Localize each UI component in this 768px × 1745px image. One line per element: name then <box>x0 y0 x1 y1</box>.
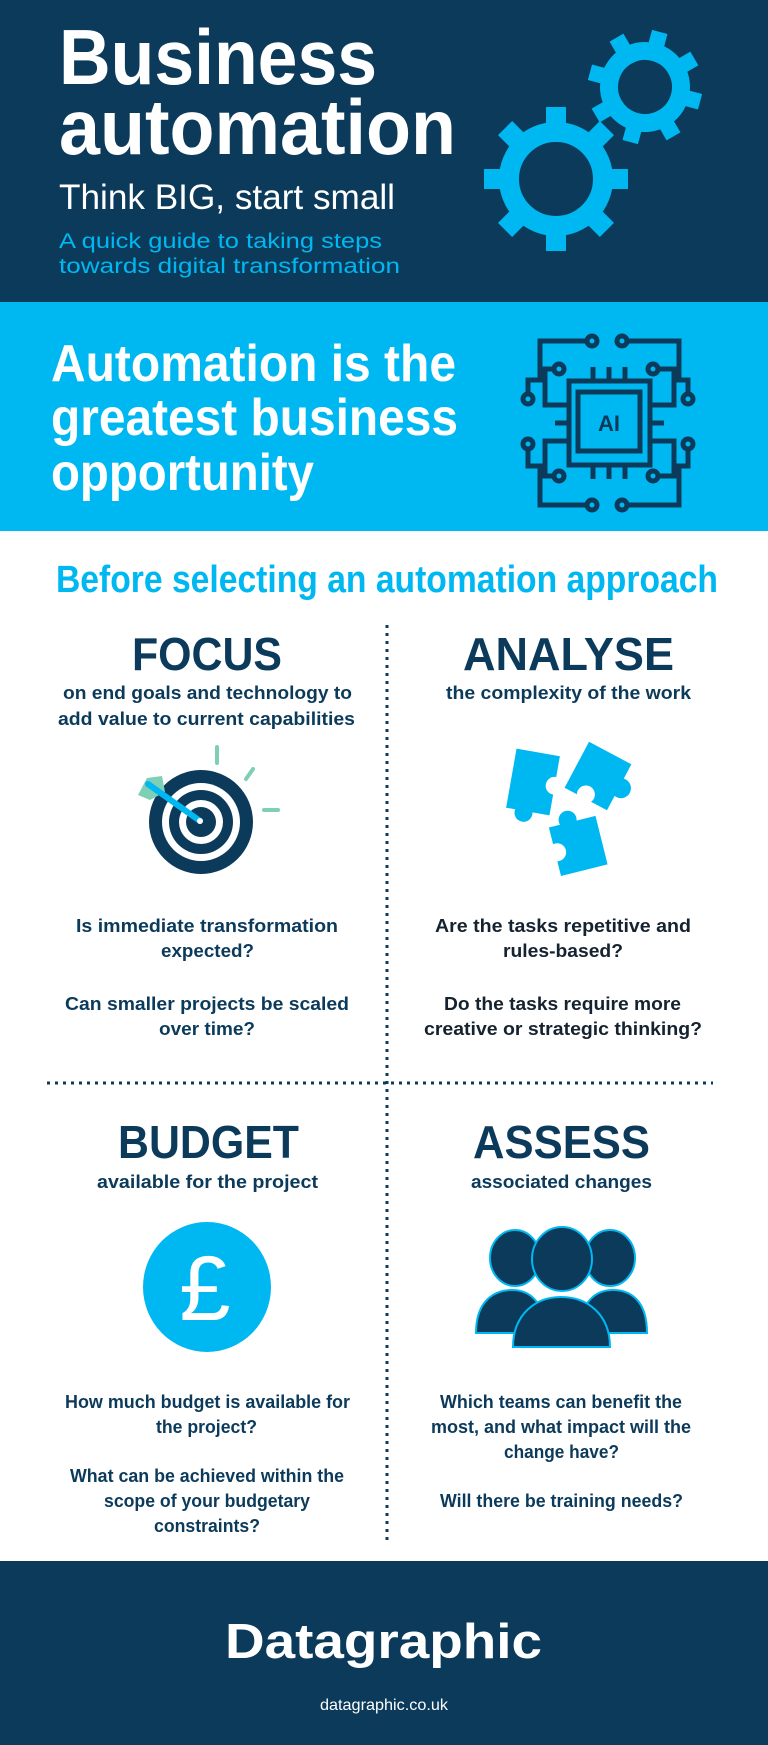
analyse questions: Are the tasks repetitive and <box>435 916 691 936</box>
banner headline <box>51 335 458 502</box>
title <box>59 13 456 171</box>
tagline: A quick guide to taking steps <box>59 230 382 253</box>
focus subtitle <box>58 683 355 729</box>
assess questions: most, and what impact will the <box>431 1417 691 1437</box>
heading: assess: ASSESS <box>473 1116 650 1168</box>
heading: budget: BUDGET <box>118 1116 299 1168</box>
focus questions: Can smaller projects be scaled <box>65 994 349 1014</box>
focus questions: over time? <box>159 1019 255 1039</box>
assess questions <box>431 1392 691 1511</box>
footer logo: Datagraphic <box>225 1615 542 1669</box>
assess questions: Which teams can benefit the <box>440 1392 682 1412</box>
assess questions: Will there be training needs? <box>440 1491 683 1511</box>
analyse questions: rules-based? <box>503 941 623 961</box>
icon: people <box>476 1227 647 1347</box>
icon: target <box>138 747 278 874</box>
panel: analyse <box>424 628 702 1039</box>
assess subtitle: associated changes <box>471 1172 652 1192</box>
panel: assess <box>431 1116 691 1511</box>
analyse questions: creative or strategic thinking? <box>424 1019 702 1039</box>
analyse questions: Do the tasks require more <box>444 994 681 1014</box>
panel: budget <box>65 1116 350 1536</box>
budget questions: How much budget is available for <box>65 1392 350 1412</box>
icon: AI chip <box>523 336 693 510</box>
budget questions: the project? <box>156 1417 257 1437</box>
tagline <box>59 230 400 278</box>
assess questions: change have? <box>504 1442 619 1462</box>
budget questions <box>65 1392 350 1536</box>
title: automation <box>59 83 456 171</box>
title: Business <box>59 13 377 101</box>
heading: focus: FOCUS <box>132 628 282 680</box>
banner headline: opportunity <box>51 444 314 502</box>
tagline: towards digital transformation <box>59 255 400 278</box>
analyse subtitle: the complexity of the work <box>446 683 692 703</box>
focus questions: Is immediate transformation <box>76 916 338 936</box>
panel: focus <box>58 628 355 1039</box>
focus subtitle: add value to current capabilities <box>58 709 355 729</box>
footer url: datagraphic.co.uk <box>320 1697 449 1714</box>
banner panel <box>0 302 768 531</box>
icon: pound coin: £ <box>179 1238 231 1340</box>
budget questions: scope of your budgetary <box>104 1491 310 1511</box>
heading: analyse: ANALYSE <box>463 628 674 680</box>
icon: AI chip: AI <box>598 411 620 436</box>
focus subtitle: on end goals and technology to <box>63 683 352 703</box>
footer <box>0 1561 768 1745</box>
icon: pound coin <box>143 1222 271 1352</box>
banner headline: greatest business <box>51 389 458 447</box>
subtitle: think big: Think BIG, start small <box>59 178 395 217</box>
analyse questions <box>424 916 702 1039</box>
banner headline: Automation is the <box>51 335 456 393</box>
budget questions: What can be achieved within the <box>70 1466 344 1486</box>
icon: puzzle pieces <box>504 742 642 878</box>
budget subtitle: available for the project <box>97 1172 318 1192</box>
icon: gears <box>484 17 715 251</box>
budget questions: constraints? <box>154 1516 260 1536</box>
focus questions <box>65 916 349 1039</box>
header panel <box>0 0 768 302</box>
focus questions: expected? <box>161 941 254 961</box>
